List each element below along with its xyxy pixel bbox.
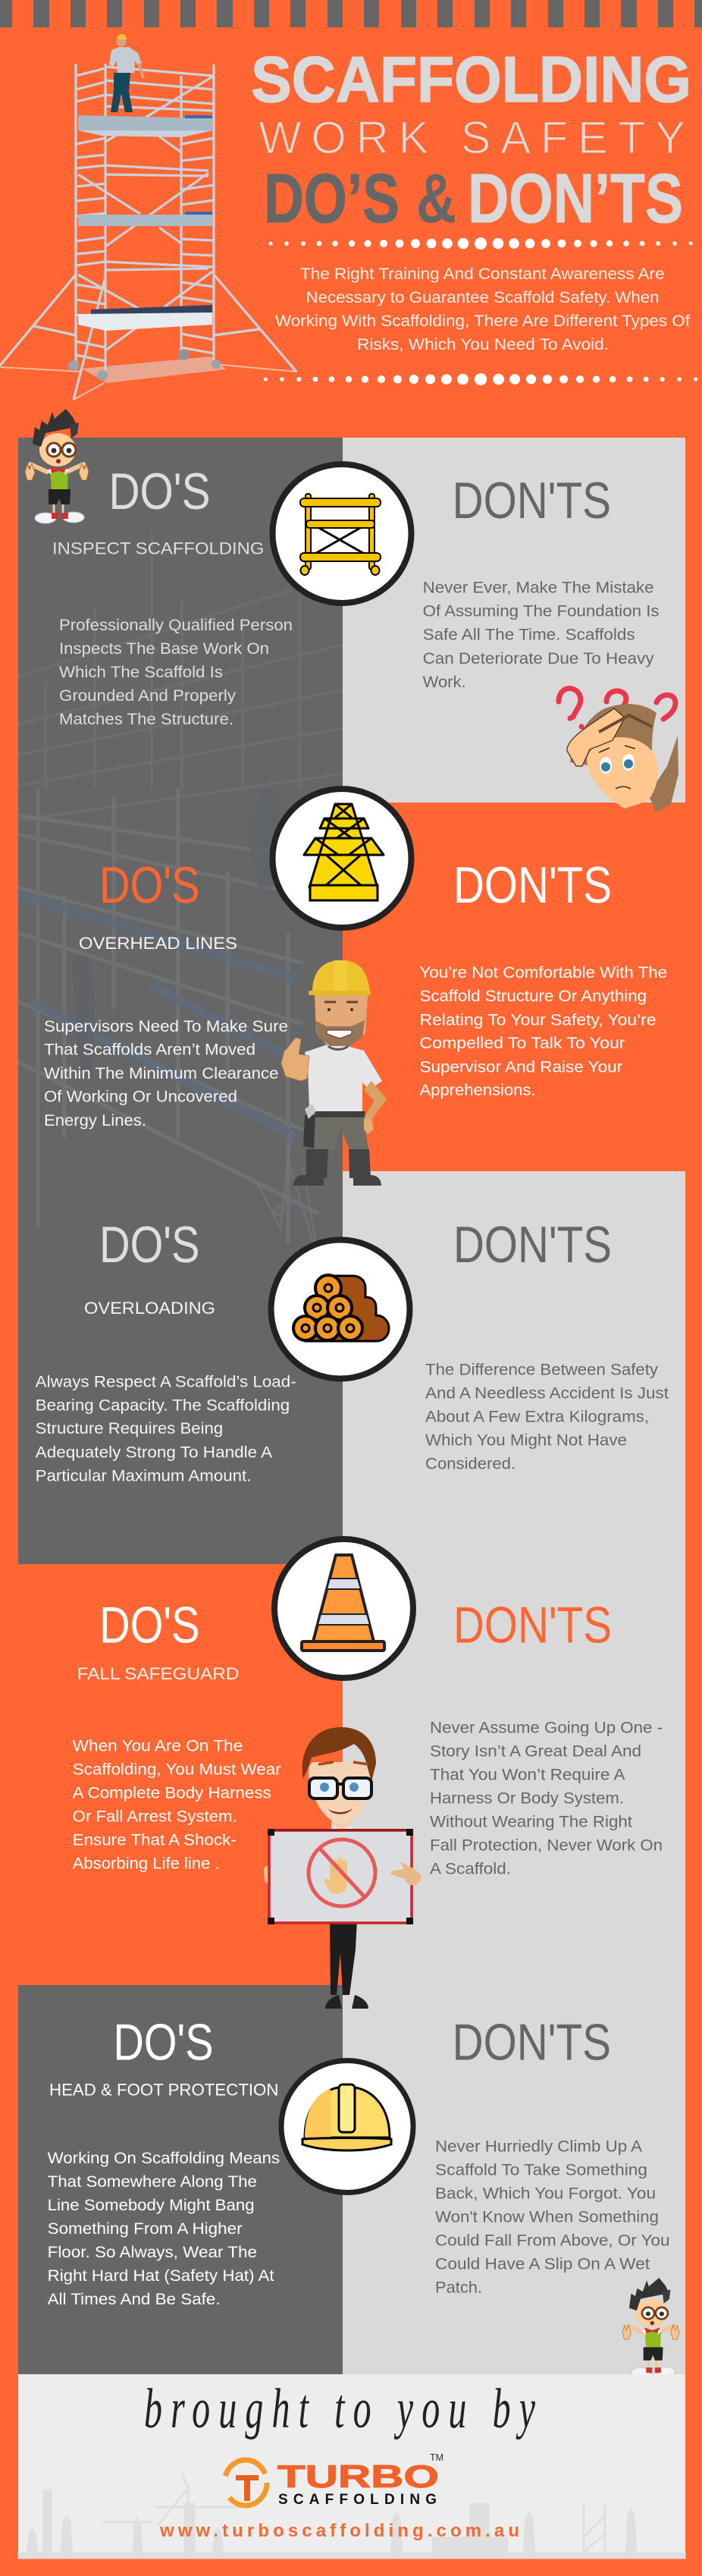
section 3 do's	[36, 1216, 296, 1484]
body text: Right Hard Hat (Safety Hat) At	[48, 2267, 274, 2285]
body text: A Complete Body Harness	[73, 1785, 271, 1802]
body text: Scaffolding, You Must Wear	[73, 1761, 281, 1779]
icon: traffic cone badge	[274, 1539, 413, 1678]
body text	[48, 2150, 280, 2308]
intro text	[275, 265, 690, 353]
body text: That You Won’t Require A	[430, 1766, 625, 1784]
body text: All Times And Be Safe.	[48, 2291, 221, 2308]
body text: Won't Know When Something	[435, 2208, 659, 2226]
subheading: HEAD & FOOT PROTECTION	[49, 2080, 278, 2099]
top stripe band	[0, 0, 702, 27]
intro text: Working With Scaffolding, There Are Different Types Of	[275, 313, 690, 330]
character: confused girl with question marks	[559, 689, 678, 812]
trademark: TM	[430, 2452, 443, 2463]
heading do's: DO'S	[113, 2013, 214, 2071]
body text: Scaffold To Take Something	[435, 2161, 647, 2179]
body text: Or Fall Arrest System.	[73, 1808, 237, 1826]
body text: Of Working Or Uncovered	[44, 1089, 237, 1106]
body text: Relating To Your Safety, You’re	[420, 1011, 657, 1029]
logo wordmark: TURBO	[277, 2458, 439, 2494]
panel: left column background	[18, 438, 343, 2374]
body text: Never Ever, Make The Mistake	[423, 580, 654, 597]
body text: Energy Lines.	[44, 1112, 146, 1129]
body text: Line Somebody Might Bang	[48, 2197, 255, 2214]
body text: Compelled To Talk To Your	[420, 1035, 625, 1052]
body text: Safe All The Time. Scaffolds	[423, 627, 635, 644]
dotted divider bottom	[264, 373, 697, 385]
logo: Turbo Scaffolding	[224, 2452, 443, 2508]
body text	[423, 580, 660, 691]
body text: Scaffold Structure Or Anything	[420, 988, 647, 1005]
body text: Never Hurriedly Climb Up A	[435, 2138, 642, 2155]
body text	[44, 1018, 288, 1129]
section 5 do's	[48, 2013, 280, 2308]
character: man with glasses holding stop sign	[264, 1727, 421, 2009]
logo sub-wordmark: SCAFFOLDING	[278, 2492, 437, 2508]
section 4 don'ts	[430, 1597, 663, 1878]
body text: Which The Scaffold Is	[59, 664, 223, 681]
body text: Professionally Qualified Person	[59, 617, 293, 634]
subheading: FALL SAFEGUARD	[77, 1664, 239, 1683]
icon: stacked logs badge	[271, 1239, 409, 1379]
character: boy with glasses, bottom	[622, 2278, 679, 2377]
body text: And A Needless Accident Is Just	[425, 1384, 669, 1402]
icon: transmission tower badge	[273, 789, 411, 928]
body text: Working On Scaffolding Means	[48, 2150, 280, 2167]
section 1 don'ts	[423, 472, 660, 691]
intro text: Risks, Which You Need To Avoid.	[357, 336, 609, 353]
panel: right column background	[343, 438, 685, 2374]
body text: Can Deteriorate Due To Heavy	[423, 650, 654, 668]
body text: Of Assuming The Foundation Is	[423, 603, 660, 620]
body text: Inspects The Base Work On	[59, 640, 269, 658]
heading don'ts: DON'TS	[453, 472, 611, 529]
intro text: The Right Training And Constant Awareness Are	[300, 265, 664, 283]
intro text: Necessary to Guarantee Scaffold Safety. When	[306, 289, 660, 306]
character: boy with glasses, top	[25, 409, 89, 523]
body text: Could Have A Slip On A Wet	[435, 2255, 650, 2273]
logo swirl mark	[224, 2460, 267, 2505]
body text: You’re Not Comfortable With The	[420, 964, 667, 982]
section 2 don'ts	[420, 856, 667, 1099]
body text: About A Few Extra Kilograms,	[425, 1408, 649, 1425]
body text: Which You Might Not Have	[425, 1431, 627, 1449]
body text: Supervisors Need To Make Sure	[44, 1018, 288, 1035]
body text	[59, 617, 293, 728]
body text: Matches The Structure.	[59, 711, 233, 728]
faded scaffold photo on left column	[18, 531, 343, 1244]
heading do's: DO'S	[99, 1216, 200, 1274]
body text: Absorbing Life line .	[73, 1855, 220, 1873]
body text: Floor. So Always, Wear The	[48, 2244, 257, 2261]
section 3 don'ts	[425, 1216, 669, 1472]
panel: footer	[18, 2374, 685, 2559]
body text: Story Isn’t A Great Deal And	[430, 1743, 641, 1760]
body text: Particular Maximum Amount.	[36, 1467, 251, 1484]
title ampersand: &	[416, 160, 456, 237]
body text: Could Fall From Above, Or You	[435, 2232, 670, 2249]
body text	[425, 1361, 669, 1472]
body text	[36, 1373, 296, 1484]
section 1 do's	[52, 463, 293, 728]
body text: Considered.	[425, 1455, 516, 1472]
section 2 do's	[44, 856, 288, 1129]
dotted divider top	[268, 237, 693, 250]
body text: Fall Protection, Never Work On	[430, 1837, 663, 1855]
body text: A Scaffold.	[430, 1861, 511, 1878]
character: construction worker with thumbs up	[281, 960, 387, 1186]
body text: Back, Which You Forgot. You	[435, 2185, 656, 2202]
heading don'ts: DON'TS	[453, 2013, 611, 2071]
body text: Always Respect A Scaffold’s Load-	[36, 1373, 296, 1390]
body text: Adequately Strong To Handle A	[36, 1444, 272, 1461]
body text: Apprehensions.	[420, 1082, 535, 1099]
subheading: OVERLOADING	[84, 1299, 215, 1318]
section 5 don'ts	[435, 2013, 670, 2296]
icon: hard hat badge	[281, 2060, 413, 2192]
body text	[435, 2138, 670, 2296]
body text: Supervisor And Raise Your	[420, 1058, 622, 1076]
website url: www.turboscaffolding.com.au	[159, 2521, 519, 2541]
body text: That Scaffolds Aren’t Moved	[44, 1041, 255, 1059]
heading do's: DO'S	[109, 463, 211, 520]
body text: Within The Minimum Clearance	[44, 1065, 279, 1082]
heading don'ts: DON'TS	[453, 1216, 612, 1274]
icon: scaffold badge	[273, 464, 411, 603]
body text	[420, 964, 667, 1099]
heading do's: DO'S	[99, 856, 200, 914]
body text: Harness Or Body System.	[430, 1790, 624, 1808]
body text: Patch.	[435, 2279, 482, 2296]
body text: Structure Requires Being	[36, 1420, 223, 1437]
body text: Ensure That A Shock-	[73, 1832, 237, 1849]
body text	[73, 1738, 281, 1873]
heading do's: DO'S	[99, 1597, 200, 1654]
body text: That Somewhere Along The	[48, 2173, 257, 2191]
section 4 do's	[73, 1597, 281, 1873]
body text: Grounded And Properly	[59, 687, 237, 705]
brought to you by: brought to you by	[144, 2377, 535, 2440]
title	[251, 44, 691, 237]
title word: do's: DO’S	[264, 160, 400, 237]
body text: Something From A Higher	[48, 2220, 243, 2238]
heading don'ts: DON'TS	[453, 1597, 612, 1654]
heading don'ts: DON'TS	[453, 856, 612, 914]
subheading: OVERHEAD LINES	[79, 934, 237, 953]
body text: Never Assume Going Up One -	[430, 1719, 663, 1737]
subheading: INSPECT SCAFFOLDING	[52, 539, 264, 558]
body text: When You Are On The	[73, 1738, 243, 1755]
body text	[430, 1719, 663, 1878]
body text: Without Wearing The Right	[430, 1814, 632, 1831]
construction silhouette	[18, 2473, 685, 2559]
body text: Work.	[423, 674, 466, 691]
illustration: mobile scaffold tower with worker	[0, 34, 297, 400]
body text: The Difference Between Safety	[425, 1361, 659, 1378]
title line: work safety: WORK SAFETY	[259, 112, 685, 163]
body text: Bearing Capacity. The Scaffolding	[36, 1396, 290, 1414]
